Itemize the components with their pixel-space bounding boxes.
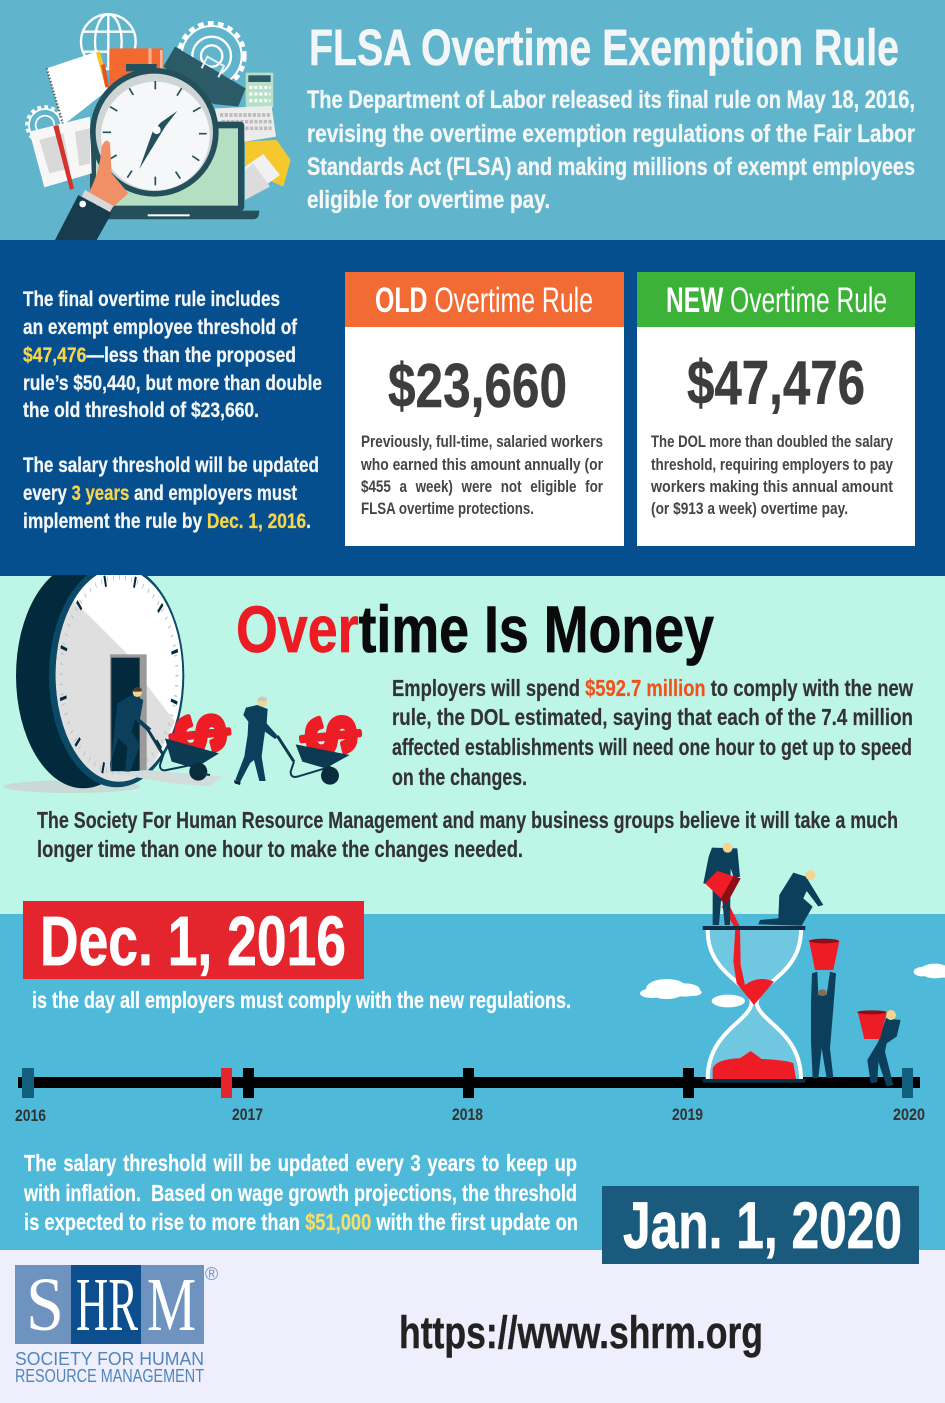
timeline year labels — [15, 1106, 925, 1125]
worker pouring bucket — [703, 843, 741, 925]
panel: rule comparison — [0, 240, 945, 576]
text block: intro: eligible for overtime pay. — [307, 186, 550, 214]
icon: yellow and white box — [245, 140, 291, 200]
figure: old threshold: $23,660 — [388, 352, 567, 421]
icon: keyboard — [215, 106, 276, 142]
icon: large gear — [179, 23, 244, 89]
panel: header — [0, 0, 945, 240]
text block: salary threshold update — [23, 1150, 578, 1235]
text block: old rule description — [360, 433, 603, 518]
text block: final rule summary: the old threshold of $23,660. — [23, 399, 259, 422]
text block: final rule summary: every 3 years and employers must — [23, 482, 297, 505]
panel: deadline and timeline — [0, 843, 945, 1250]
illustration: hourglass with workers and buckets — [640, 843, 945, 1087]
text block: compliance cost: on the changes. — [392, 764, 527, 790]
text block: salary threshold update: with inflation. Based on wage growth projections, the threshold — [23, 1180, 577, 1206]
text block: final rule summary: $47,476—less than the proposed — [23, 344, 296, 367]
heading: old rule: OLD Overtime Rule — [375, 281, 593, 320]
panel: footer — [0, 1250, 945, 1403]
worker lifting bucket — [809, 939, 839, 1078]
icon: orange book — [109, 48, 163, 85]
text block: final rule summary: The final overtime rule includes — [23, 288, 280, 311]
icon: spiral notebook — [47, 51, 110, 125]
text block: new rule description: workers making this annual amount — [650, 478, 893, 496]
timeline year labels: 2019 — [672, 1106, 703, 1124]
text block: salary threshold update: The salary threshold will be updated every 3 years to keep up — [24, 1150, 577, 1176]
icon: first wheelbarrow of dollars: $ — [158, 710, 242, 758]
logo: SHRM: ® — [205, 1264, 218, 1284]
icon: small gear — [27, 107, 63, 143]
logo: SHRM: S — [26, 1263, 64, 1347]
text block: final rule summary: implement the rule by Dec. 1, 2016. — [23, 510, 311, 533]
text block: old rule description: who earned this amount annually (or — [360, 456, 603, 474]
icon: clouds — [640, 964, 945, 1007]
text block: SHRM view — [37, 807, 898, 862]
text block: old rule description: FLSA overtime protections. — [361, 500, 534, 518]
clock shadow — [3, 780, 140, 793]
icon: laptop — [90, 122, 259, 219]
timeline — [15, 1068, 925, 1125]
text block: final rule summary — [23, 288, 322, 533]
timeline year labels: 2017 — [232, 1106, 263, 1124]
icon: hand and sleeve — [55, 141, 128, 240]
timeline year labels: 2020 — [893, 1106, 925, 1124]
text block: new rule description: (or $913 a week) overtime pay. — [651, 500, 848, 518]
illustration: stopwatch and office items — [27, 14, 291, 240]
timeline year labels: 2016 — [15, 1107, 46, 1125]
figure: new threshold: $47,476 — [687, 349, 865, 418]
text block: new rule description — [650, 433, 894, 518]
text block: SHRM view: longer time than one hour to make the changes needed. — [37, 836, 523, 862]
worker in doorway — [110, 688, 152, 772]
text block: compliance cost — [392, 675, 913, 790]
icon: hourglass — [703, 903, 805, 1083]
text block: salary threshold update: is expected to rise to more than $51,000 with the first update on — [24, 1209, 578, 1235]
link: website: https://www.shrm.org — [399, 1307, 763, 1358]
kneeling worker — [758, 870, 823, 926]
logo: SHRM — [15, 1263, 218, 1386]
illustration: giant clock with workers and wheelbarrows — [4, 575, 362, 793]
icon: globe — [81, 14, 136, 69]
icon: second wheelbarrow of dollars: $ — [289, 712, 372, 760]
text block: final rule summary: rule’s $50,440, but more than double — [23, 372, 322, 395]
text block: intro — [307, 86, 915, 214]
panel: overtime is money — [0, 557, 945, 914]
text: compliance day: is the day all employers must comply with the new regulations. — [32, 987, 571, 1013]
worker carrying bucket — [857, 1010, 901, 1087]
logo: SHRM: M — [147, 1263, 196, 1347]
text block: old rule description: $455 a week) were not eligible for — [361, 478, 603, 496]
text block: final rule summary: The salary threshold will be updated — [23, 454, 319, 477]
text block: final rule summary: an exempt employee threshold of — [23, 316, 298, 339]
icon: second wheelbarrow of dollars — [276, 715, 362, 785]
icon: briefcase — [163, 47, 246, 107]
panel: new overtime rule — [637, 272, 915, 546]
icon: stopwatch — [90, 64, 219, 197]
icon: calculator — [246, 73, 273, 108]
text block: old rule description: Previously, full-time, salaried workers — [361, 433, 603, 451]
icon: giant clock — [16, 575, 184, 788]
logo: SHRM: HR — [76, 1263, 138, 1347]
icon: open book — [29, 117, 92, 190]
timeline year labels: 2018 — [452, 1106, 483, 1124]
text block: new rule description: threshold, requiring employers to pay — [651, 456, 894, 474]
worker with wheelbarrow — [234, 696, 278, 785]
logo: SHRM: RESOURCE MANAGEMENT — [15, 1366, 204, 1386]
logo: SHRM: SOCIETY FOR HUMAN — [15, 1349, 204, 1369]
heading: overtime is money: Overtime Is Money — [236, 592, 714, 666]
icon: first wheelbarrow of dollars — [146, 713, 232, 781]
callout: Dec. 1, 2016: Dec. 1, 2016 — [40, 902, 346, 980]
panel: old overtime rule — [345, 272, 624, 546]
icon: door — [110, 654, 222, 786]
